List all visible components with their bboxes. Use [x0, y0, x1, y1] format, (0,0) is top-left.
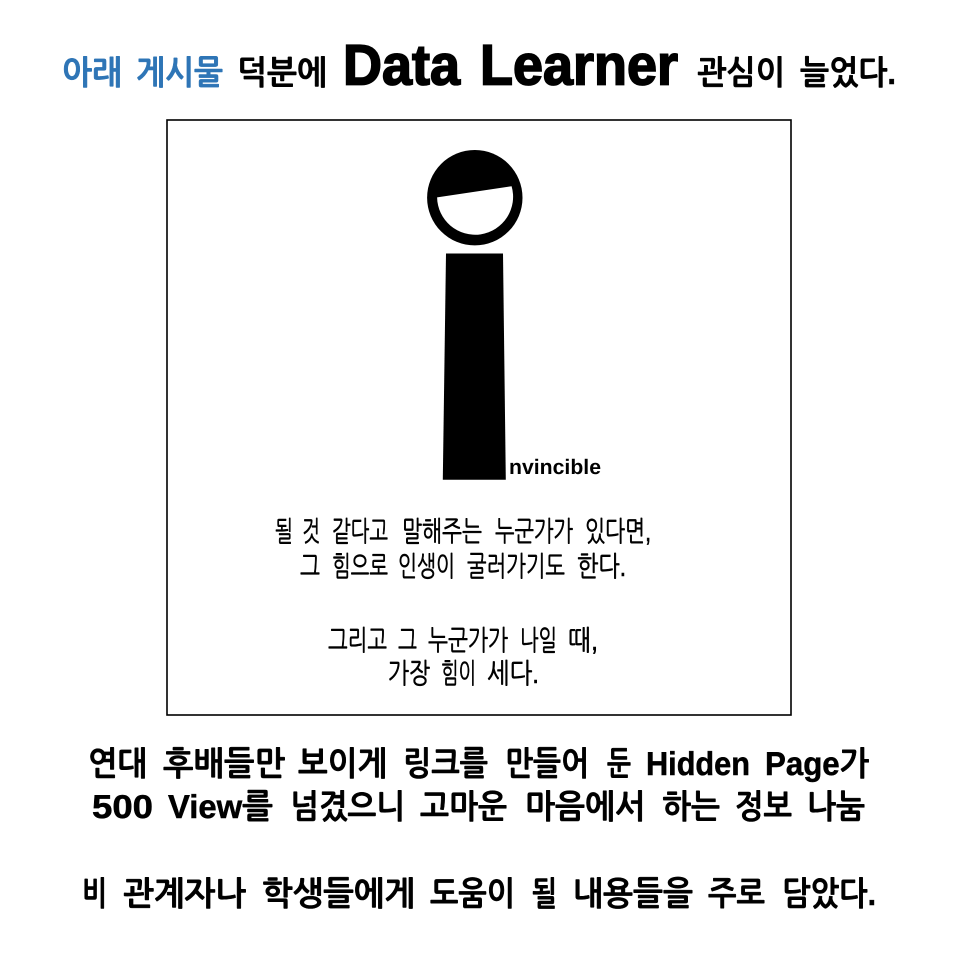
- message line 1: 누군가가: [495, 516, 573, 547]
- note line 2: 정보: [735, 788, 792, 825]
- text block: audience note: 내용들을: [573, 875, 693, 912]
- title: closing words: 관심이: [697, 54, 785, 91]
- text block: audience note: 주로: [708, 875, 765, 912]
- note line 2: View를: [168, 788, 273, 825]
- label: nvincible: nvincible: [509, 456, 601, 479]
- note line 2: 고마운: [420, 788, 507, 825]
- note line 1: 둔: [607, 745, 631, 782]
- message line 2: 한다.: [577, 551, 626, 582]
- note line 1: [88, 745, 869, 782]
- note line 1: Hidden: [646, 745, 750, 782]
- message line 1: [275, 516, 651, 547]
- note line 2: 나눔: [807, 788, 865, 825]
- message line 2: [300, 551, 626, 582]
- note line 1: Page가: [765, 745, 869, 782]
- message line 3: 누군가가: [428, 625, 508, 656]
- text block: hidden page note: [88, 745, 869, 825]
- message line 3: 나일: [520, 625, 557, 656]
- text block: audience note: 도움이: [430, 875, 515, 912]
- title: Data Learner: Learner: [480, 34, 678, 98]
- message line 1: 것: [302, 516, 320, 547]
- message line 4: 세다.: [487, 658, 539, 689]
- note line 2: [92, 788, 865, 825]
- message line 4: [388, 658, 539, 689]
- note line 2: 하는: [662, 788, 720, 825]
- note line 1: 연대: [88, 745, 147, 782]
- message line 2: 힘으로: [332, 551, 388, 582]
- text block: audience note: 비: [82, 875, 107, 912]
- message line 1: 있다면,: [585, 516, 651, 547]
- message line 4: 힘이: [441, 658, 476, 689]
- message line 4: 가장: [388, 658, 430, 689]
- note line 2: 마음에서: [525, 788, 645, 825]
- message line 1: 될: [275, 516, 293, 547]
- message line 1: 말해주는: [402, 516, 482, 547]
- message line 2: 인생이: [398, 551, 455, 582]
- icon: letter i body: [443, 254, 506, 480]
- message line 3: [328, 625, 598, 656]
- note line 1: 만들어: [505, 745, 589, 782]
- title: blue lead words: 아래: [62, 54, 122, 91]
- note line 1: 링크를: [403, 745, 488, 782]
- text block: audience note: 될: [532, 875, 557, 912]
- title: Data Learner: [343, 34, 678, 98]
- text block: audience note: 관계자나: [123, 875, 246, 912]
- message line 3: 때,: [568, 625, 598, 656]
- text block: audience note: 학생들에게: [262, 875, 415, 912]
- title: middle word: 덕분에: [237, 54, 327, 91]
- note line 1: 보이게: [298, 745, 387, 782]
- text block: audience note: 담았다.: [782, 875, 876, 912]
- message line 2: 굴러가기도: [467, 551, 565, 582]
- message line 2: 그: [300, 551, 320, 582]
- title: closing words: [697, 54, 896, 91]
- note line 2: 넘겼으니: [290, 788, 405, 825]
- text block: audience note: [82, 875, 876, 912]
- note line 2: 500: [92, 788, 153, 825]
- message line 3: 그리고: [328, 625, 387, 656]
- title: [62, 34, 896, 98]
- title: closing words: 늘었다.: [800, 54, 896, 91]
- message line 3: 그: [398, 625, 417, 656]
- title: blue lead words: [62, 54, 223, 91]
- title: blue lead words: 게시물: [136, 54, 223, 91]
- panel: invincible card: [167, 120, 791, 715]
- title: Data Learner: Data: [343, 34, 461, 98]
- icon: head with hair: [427, 150, 522, 245]
- text block: handwritten message: [275, 516, 651, 689]
- message line 1: 같다고: [332, 516, 388, 547]
- note line 1: 후배들만: [163, 745, 285, 782]
